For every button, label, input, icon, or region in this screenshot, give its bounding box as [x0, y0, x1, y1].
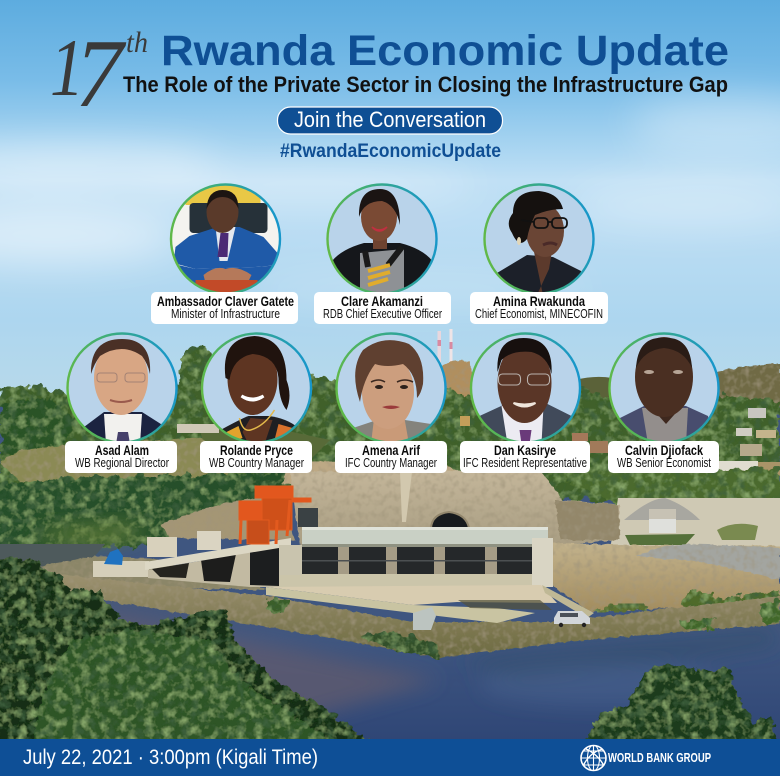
role: WB Regional Director: [75, 455, 169, 470]
water behind the dam: [0, 544, 105, 575]
name card: [151, 292, 298, 324]
name: Rolande Pryce: [220, 442, 293, 458]
upper right ground: [540, 468, 780, 550]
name: Asad Alam: [95, 442, 149, 458]
tunnel arch: [431, 512, 469, 528]
ring: [68, 334, 176, 442]
title: edition number: th: [126, 26, 148, 59]
radio towers on the hill: [438, 329, 452, 363]
icon: globe: [581, 745, 606, 771]
village houses: [177, 408, 780, 478]
name card: [608, 441, 719, 473]
white plant boxes: [147, 531, 221, 557]
hashtag: #RwandaEconomicUpdate: [280, 141, 501, 162]
name card: [65, 441, 177, 473]
ring: [471, 334, 580, 442]
dam apron: [266, 585, 594, 623]
photo: [486, 186, 592, 292]
foreground bush right: [582, 665, 778, 745]
photo: [608, 332, 720, 444]
title: edition number: [50, 20, 148, 128]
river reflection tones: [100, 610, 780, 720]
sunlit foliage patch: [30, 630, 340, 745]
ring: [336, 334, 446, 442]
river: [0, 570, 780, 741]
left dam block: [93, 561, 149, 577]
machinery near roof: [298, 508, 318, 527]
portrait row 1: Amina Rwakunda: [470, 183, 608, 324]
green hillside landscape: [0, 345, 780, 500]
name card: [200, 441, 312, 473]
ring: [484, 184, 594, 294]
role: Chief Economist, MINECOFIN: [475, 306, 603, 321]
name: Calvin Djiofack: [625, 442, 703, 458]
ring: [202, 334, 311, 442]
dam lower wall: [279, 574, 535, 587]
portrait row 2: Calvin Djiofack: [608, 332, 720, 473]
powerhouse roof: [302, 527, 548, 547]
spillway gates: [302, 547, 534, 574]
portrait row 2: Amena Arif: [335, 332, 447, 473]
photo: [329, 186, 435, 292]
name: Clare Akamanzi: [341, 293, 423, 309]
name: Ambassador Claver Gatete: [157, 293, 294, 309]
portrait row 1: Clare Akamanzi: [314, 183, 451, 324]
photo: [170, 183, 282, 295]
logo wordmark: WORLD BANK GROUP: [608, 750, 711, 765]
far hills: [430, 361, 780, 420]
portrait row 2: Rolande Pryce: [200, 332, 312, 473]
blue tarp: [104, 549, 123, 565]
role: WB Country Manager: [209, 455, 305, 470]
ring: [171, 184, 280, 294]
photo: [470, 332, 582, 444]
photo: [69, 335, 176, 441]
ring: [610, 334, 718, 442]
right abutment: [532, 538, 553, 587]
call to action pill: Join the Conversation: [294, 107, 486, 132]
excavated concrete headwall: [290, 470, 620, 546]
portrait row 2: Asad Alam: [65, 332, 178, 473]
small shed: [413, 607, 436, 630]
footer bar: [0, 739, 780, 776]
role: IFC Resident Representative: [463, 455, 587, 470]
name: Amina Rwakunda: [493, 293, 585, 309]
photo: [200, 332, 312, 444]
bank vegetation: [265, 600, 780, 658]
river embankment: [55, 574, 780, 658]
left gate wall: [279, 545, 302, 575]
ring: [328, 184, 436, 294]
orange gantry crane: [239, 486, 311, 544]
right rock slope: [552, 543, 780, 612]
small white building: [649, 509, 676, 533]
role: Minister of Infrastructure: [171, 306, 280, 321]
event date and time: July 22, 2021 · 3:00pm (Kigali Time): [23, 746, 318, 769]
photo: [335, 332, 447, 444]
name: Dan Kasirye: [494, 442, 556, 458]
name card: [470, 292, 608, 324]
role: RDB Chief Executive Officer: [323, 306, 442, 321]
title: edition number: 1: [50, 22, 84, 113]
left forested slope: [0, 472, 290, 550]
name card: [460, 441, 590, 473]
role: WB Senior Economist: [617, 455, 711, 470]
bare slope beside the forest: [160, 495, 295, 540]
white car: [554, 611, 590, 627]
title: edition number: 7: [75, 20, 127, 128]
foreground trees left: [0, 558, 378, 745]
portrait row 2: Dan Kasirye: [460, 332, 590, 473]
role: IFC Country Manager: [345, 455, 437, 470]
name card: [314, 292, 451, 324]
name card: [335, 441, 447, 473]
title: Rwanda Economic Update: [161, 27, 729, 75]
forest edge grass: [30, 524, 145, 544]
sky background: [0, 0, 780, 400]
portrait row 1: Ambassador Claver Gatete: [151, 183, 298, 324]
bridge deck and piers: [145, 538, 291, 587]
name: Amena Arif: [362, 442, 420, 458]
World Bank Group logo: [581, 745, 711, 771]
ground left of the dam: [40, 556, 270, 590]
